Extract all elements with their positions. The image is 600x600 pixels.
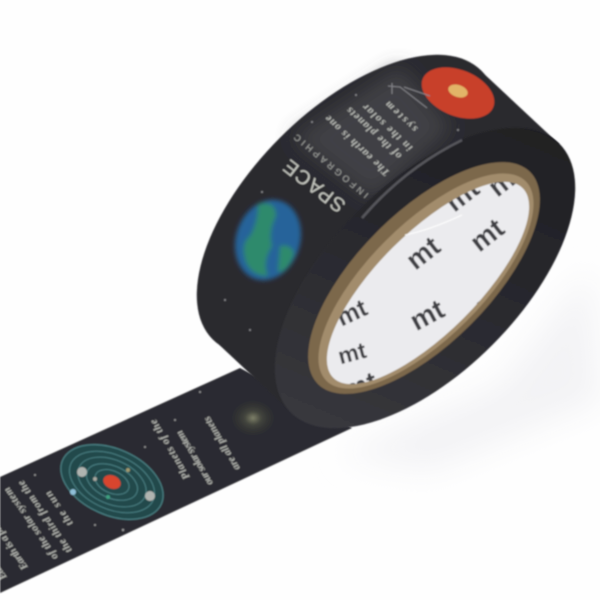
strip text: block right of the diagram <box>148 414 243 487</box>
roll text block: The earth is one <box>323 112 392 178</box>
roll text block: of the planets <box>345 104 404 161</box>
cast shadow <box>340 270 600 470</box>
mt logo pattern: mt <box>339 366 381 406</box>
earth <box>225 191 311 289</box>
strip text: block right of the diagram: our solar system <box>174 428 216 487</box>
roll text block: system <box>383 99 421 135</box>
sun diagram lines <box>388 83 430 108</box>
mt logo pattern: mt <box>400 230 446 276</box>
title SPACE: SPACE <box>278 154 350 216</box>
subtitle INFOGRAPHIC: INFOGRAPHIC <box>291 132 370 200</box>
strip text: block left of the diagram <box>0 478 75 582</box>
strip text: block right of the diagram: are all planets <box>202 414 243 472</box>
front face of the roll <box>275 128 576 428</box>
mt logo pattern <box>338 180 516 386</box>
roll text block <box>323 99 421 178</box>
stars on roll <box>224 94 506 331</box>
strip text: block right of the diagram: Planets of the <box>148 417 193 481</box>
solar system diagram <box>49 430 175 534</box>
planets on orbits <box>70 467 155 501</box>
cardboard core <box>271 125 577 431</box>
strip text: block left of the diagram: the sun <box>43 488 75 528</box>
sun <box>414 57 502 129</box>
galaxy glow <box>226 396 280 440</box>
mt logo pattern: mt <box>405 293 449 337</box>
roll body <box>145 3 559 412</box>
crease on core <box>405 215 462 235</box>
mt logo pattern: mt <box>469 275 515 321</box>
mt logo pattern: mt <box>335 337 369 369</box>
tape strip <box>0 368 352 593</box>
stars on strip <box>34 391 201 531</box>
ridge highlight <box>362 140 462 218</box>
mt logo pattern: mt <box>405 340 449 384</box>
lighter band on the tape side <box>292 66 452 200</box>
roll text block: in the solar <box>360 101 415 153</box>
core opening <box>298 153 558 413</box>
mt logo pattern: mt <box>464 212 510 258</box>
mt logo pattern: mt <box>439 172 485 218</box>
mt logo pattern: mt <box>482 157 528 203</box>
strip text: block left of the diagram: of the solar system <box>2 485 60 562</box>
mt logo pattern: mt <box>332 294 372 332</box>
strip text: block left of the diagram: the third from the <box>16 478 74 555</box>
